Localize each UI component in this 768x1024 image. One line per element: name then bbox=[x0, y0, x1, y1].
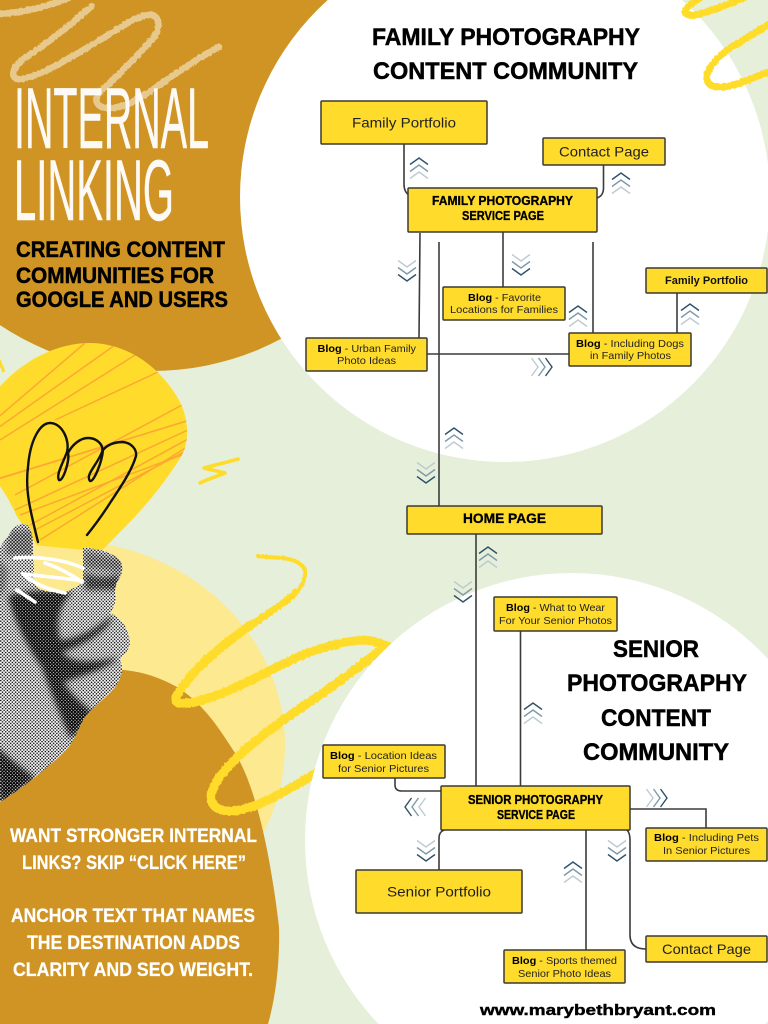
node: blog location ideas: for Senior Pictures bbox=[338, 763, 429, 775]
heading: senior community bbox=[567, 636, 747, 766]
node: contact page bbox=[543, 138, 665, 165]
node: blog favorite locations bbox=[443, 287, 565, 320]
arrow: up beside sports blog bbox=[564, 862, 582, 882]
node: family portfolio: Family Portfolio bbox=[352, 114, 456, 130]
panel: top-left title blob bbox=[0, 0, 427, 371]
node: contact page: Contact Page bbox=[559, 144, 649, 160]
panel: lower-left callout blob bbox=[0, 670, 279, 1024]
heading: senior community: SENIOR bbox=[613, 636, 699, 663]
arrow: up to home page bbox=[479, 547, 497, 568]
panel: senior community circle bbox=[305, 573, 768, 1024]
node: family service page bbox=[408, 188, 597, 232]
callout text: LINKS? SKIP “CLICK HERE” bbox=[22, 853, 246, 874]
node: senior portfolio: Senior Portfolio bbox=[387, 884, 491, 900]
heading: senior community: CONTENT bbox=[601, 705, 711, 732]
subtitle bbox=[16, 237, 228, 312]
bulb filament bbox=[27, 423, 136, 542]
node: family service page: SERVICE PAGE bbox=[462, 209, 544, 223]
arrow: down to senior portfolio bbox=[417, 840, 435, 861]
heading: family community: CONTENT COMMUNITY bbox=[373, 58, 638, 85]
node: senior service page: SERVICE PAGE bbox=[497, 808, 575, 822]
node: family service page: FAMILY PHOTOGRAPHY bbox=[432, 194, 574, 208]
node: blog location ideas bbox=[323, 745, 445, 778]
arrow: up to family portfolio bbox=[410, 158, 428, 178]
arrow: up beside favorite locations bbox=[569, 306, 587, 326]
arrow: up to small family portfolio bbox=[681, 304, 699, 324]
heading: senior community: COMMUNITY bbox=[583, 739, 729, 766]
subtitle: GOOGLE AND USERS bbox=[16, 287, 228, 312]
arrow: left to location blog bbox=[405, 798, 426, 816]
node: home page bbox=[407, 506, 602, 534]
large yellow scribble bbox=[176, 556, 388, 811]
bulb base coil bbox=[15, 557, 83, 602]
arrow: down from home page bbox=[454, 582, 472, 602]
node: senior service page bbox=[441, 786, 630, 830]
zigzag accent bbox=[200, 459, 238, 483]
node: blog sports themed: Blog - Sports themed bbox=[512, 955, 617, 967]
callout text: THE DESTINATION ADDS bbox=[27, 933, 240, 954]
text: INTERNAL bbox=[14, 71, 209, 167]
node: blog including dogs: in Family Photos bbox=[590, 350, 671, 362]
node: blog including pets: Blog - Including Pets bbox=[654, 832, 759, 844]
pale yellow circle bbox=[0, 540, 285, 950]
callout text: ANCHOR TEXT THAT NAMES bbox=[11, 906, 255, 927]
node: blog favorite locations: Blog - Favorite bbox=[468, 292, 541, 304]
node: family portfolio bbox=[321, 101, 487, 144]
arrow: right to pets blog bbox=[646, 789, 667, 807]
node: blog what to wear bbox=[494, 597, 617, 631]
subtitle: CREATING CONTENT bbox=[16, 237, 226, 262]
node: home page: HOME PAGE bbox=[463, 510, 546, 526]
node: blog urban family: Blog - Urban Family bbox=[318, 343, 417, 355]
node: blog including dogs: Blog - Including Dogs bbox=[576, 338, 684, 350]
arrow: up to contact page bbox=[612, 173, 630, 194]
subtitle: COMMUNITIES FOR bbox=[16, 263, 214, 288]
node: blog including pets: In Senior Pictures bbox=[663, 845, 750, 857]
heading: senior community: PHOTOGRAPHY bbox=[567, 670, 747, 697]
node: blog location ideas: Blog - Location Ideas bbox=[330, 750, 437, 762]
bulb glass bbox=[0, 343, 187, 552]
arrow: down to contact page bbox=[608, 840, 626, 861]
node: blog urban family bbox=[306, 338, 427, 371]
callout text bbox=[10, 826, 257, 981]
node: blog sports themed bbox=[504, 950, 625, 983]
callout text: WANT STRONGER INTERNAL bbox=[10, 826, 257, 847]
arrow: down to favorite blog bbox=[512, 254, 530, 275]
node: blog including pets bbox=[646, 828, 767, 861]
heading: family community bbox=[372, 24, 640, 85]
arrow: right to dogs blog bbox=[532, 358, 552, 376]
chevrons bbox=[398, 158, 699, 882]
node: blog what to wear: Blog - What to Wear bbox=[506, 602, 606, 614]
node: contact page senior: Contact Page bbox=[662, 941, 751, 957]
small yellow accent bbox=[0, 360, 4, 372]
node: blog including dogs bbox=[569, 333, 691, 366]
website url: www.marybethbryant.com bbox=[479, 1002, 716, 1019]
arrow: down to urban blog bbox=[398, 260, 416, 281]
node: small family portfolio bbox=[646, 268, 767, 293]
node: blog what to wear: For Your Senior Photos bbox=[499, 615, 612, 627]
bulb neck bbox=[33, 545, 84, 593]
callout text: CLARITY AND SEO WEIGHT. bbox=[13, 960, 253, 981]
node: contact page senior bbox=[646, 936, 767, 962]
arrow: up beside what to wear bbox=[524, 703, 542, 724]
halftone hand bbox=[0, 524, 130, 802]
decorative pale scribble bbox=[0, 0, 219, 108]
node: senior portfolio bbox=[356, 870, 522, 913]
title bbox=[14, 71, 209, 239]
arrow: down to home page bbox=[417, 462, 435, 483]
node: blog favorite locations: Locations for Families bbox=[450, 304, 558, 316]
node: blog urban family: Photo Ideas bbox=[337, 355, 396, 367]
orange bulb scribbles bbox=[0, 343, 190, 540]
node: blog sports themed: Senior Photo Ideas bbox=[518, 968, 611, 980]
connector lines bbox=[395, 144, 706, 950]
arrow: up to service page bbox=[445, 428, 463, 448]
title: LINKING bbox=[14, 143, 174, 239]
heading: family community: FAMILY PHOTOGRAPHY bbox=[372, 24, 640, 51]
node: senior service page: SENIOR PHOTOGRAPHY bbox=[468, 793, 604, 807]
icon: light bulb with hand bbox=[0, 343, 190, 810]
panel: family community circle bbox=[240, 0, 768, 462]
node: small family portfolio: Family Portfolio bbox=[665, 275, 748, 287]
top-right yellow scribble bbox=[685, 0, 768, 87]
